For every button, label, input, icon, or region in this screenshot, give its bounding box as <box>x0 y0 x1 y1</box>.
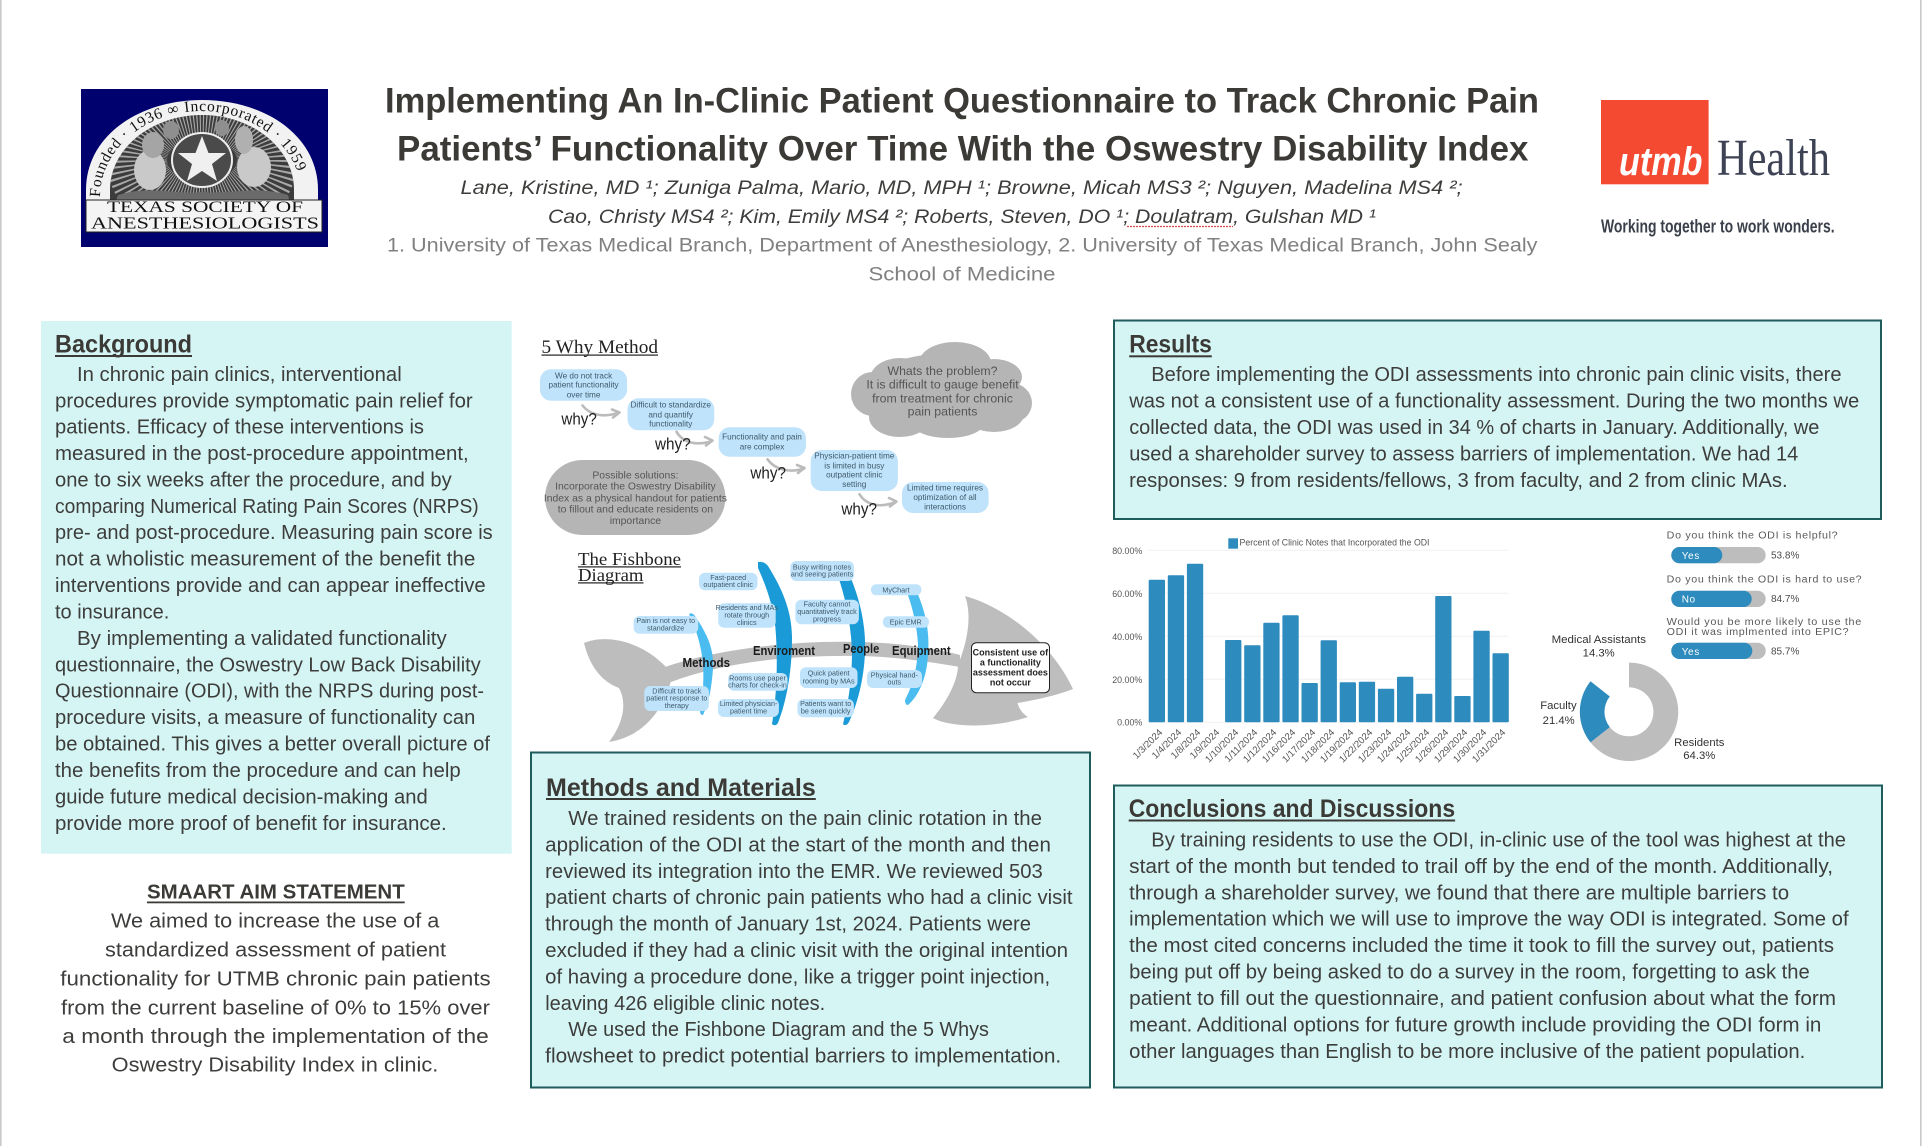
problem box: not occur <box>990 678 1031 688</box>
cause: pain not easy <box>634 616 698 634</box>
cause: residents rotate: rotate through <box>724 611 769 620</box>
text block: results body: collected data, the ODI was used in 34 % of charts in January. Additionally, we <box>1129 417 1819 439</box>
x axis labels: 1/16/2024 <box>1260 727 1299 765</box>
authors: Cao, Christy MS4 ²; Kim, Emily MS4 ²; Roberts, Steven, DO ¹; Doulatram, Gulshan MD ¹ <box>548 206 1377 228</box>
pill: possible solutions: Possible solutions: <box>592 470 678 481</box>
text block: methods body: excluded if they had a clinic visit with the original intention <box>545 940 1068 962</box>
step 3 <box>719 427 806 457</box>
question 3: 85.7% <box>1771 646 1799 657</box>
logo: UTMB Health: Working together to work wonders. <box>1601 216 1835 236</box>
step 1 <box>540 369 627 401</box>
affiliations <box>387 236 1538 286</box>
text block: conclusions body: meant. Additional options for future growth include providing the ODI form in <box>1129 1014 1821 1036</box>
question 1: 53.8% <box>1771 550 1799 562</box>
logo: UTMB Health <box>1601 100 1835 236</box>
text block: aim statement: from the current baseline of 0% to 15% over <box>61 997 490 1019</box>
text block: background body <box>55 364 493 835</box>
cause: difficult to track: Difficult to track <box>652 686 702 695</box>
cause: residents rotate: Residents and MAs <box>716 603 778 612</box>
pill: possible solutions <box>544 460 727 535</box>
step 3: Functionality and pain <box>722 433 802 442</box>
x axis labels: 1/3/2024 <box>1131 727 1166 762</box>
problem box: Consistent use of <box>973 647 1049 657</box>
text block: background body: By implementing a validated functionality <box>77 628 447 650</box>
pill: possible solutions: to fillout and educate residents on <box>558 505 713 516</box>
x axis labels: 1/22/2024 <box>1337 727 1376 765</box>
donut labels: Residents <box>1674 737 1725 749</box>
text block: methods body <box>545 808 1073 1068</box>
text block: results body: Before implementing the ODI assessments into chronic pain clinic visits, there <box>1151 364 1842 386</box>
cause: quick rooming: Quick patient <box>808 669 850 678</box>
text block: background body: patients. Efficacy of these interventions is <box>55 417 424 439</box>
text block: conclusions body: other languages than English to be more inclusive of the patient population. <box>1129 1041 1805 1063</box>
text block: background body: pre- and post-procedure. Measuring pain score is <box>55 522 493 544</box>
cause: physical handouts <box>867 670 922 688</box>
cause: Epic EMR: Epic EMR <box>890 618 922 626</box>
text block: background body: In chronic pain clinics, interventional <box>77 364 402 386</box>
cause: physical handouts: outs <box>888 678 901 687</box>
text block: results body: responses: 9 from residents/fellows, 3 from faculty, and 2 from clinic MAs. <box>1129 470 1788 492</box>
donut labels: Medical Assistants <box>1552 634 1646 646</box>
heading: background: Background <box>55 330 192 358</box>
x axis labels: 1/4/2024 <box>1150 727 1185 762</box>
text block: background body: provide more proof of benefit for insurance. <box>55 813 447 835</box>
x axis labels: 1/10/2024 <box>1203 727 1242 765</box>
title <box>385 82 1539 168</box>
cause: faculty cannot track: progress <box>813 614 841 623</box>
x axis labels: 1/17/2024 <box>1280 727 1319 765</box>
cause: busy writing notes: and seeing patients <box>791 570 854 579</box>
category labels: Enviroment <box>753 644 816 658</box>
cloud: what's the problem: It is difficult to gauge benefit <box>866 378 1019 392</box>
text block: aim statement: functionality for UTMB chronic pain patients <box>60 968 491 990</box>
donut chart: respondents <box>1540 634 1725 762</box>
question 1: Yes <box>1682 551 1700 562</box>
authors: Lane, Kristine, MD ¹; Zuniga Palma, Mario, MD, MPH ¹; Browne, Micah MS3 ²; Nguyen, Madelina MS4 ²; <box>460 177 1462 199</box>
authors <box>460 177 1462 228</box>
cause: faculty cannot track: Faculty cannot <box>804 600 850 609</box>
donut labels: 21.4% <box>1543 715 1575 727</box>
question 3: Would you be more likely to use the <box>1667 617 1862 628</box>
cause: paper charts <box>728 673 788 691</box>
donut labels: 64.3% <box>1683 750 1715 762</box>
x axis labels: 1/25/2024 <box>1394 727 1433 765</box>
cause: pain not easy: Pain is not easy to <box>636 616 695 625</box>
panel: methods and materials <box>531 752 1090 1088</box>
step 4 <box>811 450 898 491</box>
text block: conclusions body: patient to fill out the questionnaire, and patient confusion about what the form <box>1129 988 1836 1010</box>
heading: 5 why method: 5 Why Method <box>542 337 659 358</box>
text block: conclusions body <box>1129 829 1849 1063</box>
panel: 5 why method <box>540 337 1032 535</box>
step 2: functionality <box>649 420 693 429</box>
category labels: Methods <box>682 656 730 670</box>
title: Implementing An In-Clinic Patient Questionnaire to Track Chronic Pain <box>385 82 1539 120</box>
logo: UTMB Health: Health <box>1717 130 1830 187</box>
cause: residents rotate: clinics <box>737 618 757 627</box>
step 5: interactions <box>924 502 966 511</box>
category labels: People <box>843 642 879 656</box>
cause: quick rooming: rooming by MAs <box>803 676 855 685</box>
category labels <box>682 642 951 670</box>
y axis labels: 80.00% <box>1112 546 1142 556</box>
arrows: why connectors <box>582 406 896 506</box>
donut labels: Faculty <box>1540 700 1577 712</box>
x axis labels: 1/24/2024 <box>1375 727 1414 765</box>
cause: fast-paced clinic: outpatient clinic <box>703 580 753 589</box>
cause: physical handouts: Physical hand- <box>871 670 918 679</box>
step 1: patient functionality <box>549 381 620 390</box>
question 2: Do you think the ODI is hard to use? <box>1667 575 1862 586</box>
text block: background body: procedures provide symptomatic pain relief for <box>55 390 473 412</box>
panel: background <box>41 321 512 854</box>
step 5: Limited time requires <box>907 484 983 493</box>
cause: difficult to track: therapy <box>665 701 689 710</box>
text block: background body: one to six weeks after the procedure, and by <box>55 469 452 491</box>
heading: methods and materials: Methods and Materials <box>546 774 816 802</box>
step 1: over time <box>567 390 601 399</box>
cause: MyChart <box>871 584 921 595</box>
cause: Epic EMR <box>883 616 929 628</box>
bars <box>1149 564 1509 722</box>
y axis labels: 0.00% <box>1117 718 1142 728</box>
cloud: what's the problem <box>851 342 1032 438</box>
question 2 <box>1667 575 1862 607</box>
text block: background body: questionnaire, the Oswestry Low Back Disability <box>55 654 481 676</box>
cause: fast-paced clinic <box>699 573 758 590</box>
text block: conclusions body: implementation which we will use to improve the way ODI is integrated. Some of <box>1129 908 1849 930</box>
text block: conclusions body: through a shareholder survey, we found that there are multiple barriers to <box>1129 882 1789 904</box>
problem box: assessment does <box>973 668 1048 678</box>
cause: fast-paced clinic: Fast-paced <box>710 573 746 582</box>
y axis labels: 60.00% <box>1112 589 1142 599</box>
panel: fishbone diagram <box>578 549 1073 742</box>
text block: results body: was not a consistent use of a functionality assessment. During the two months we <box>1128 391 1859 413</box>
cause: quick rooming <box>800 667 858 688</box>
text block: aim statement: We aimed to increase the use of a <box>111 910 440 932</box>
pill: possible solutions: importance <box>610 516 661 527</box>
text block: conclusions body: the most cited concerns included the time it took to fill the survey out, patients <box>1129 935 1834 957</box>
text block: aim statement: a month through the implementation of the <box>62 1026 489 1048</box>
text block: background body: be obtained. This gives a better overall picture of <box>55 734 490 756</box>
x axis labels: 1/26/2024 <box>1413 727 1452 765</box>
cause: faculty cannot track <box>795 600 859 624</box>
text block: methods body: leaving 426 eligible clinic notes. <box>545 993 825 1015</box>
x axis labels: 1/11/2024 <box>1223 727 1261 765</box>
bones <box>689 562 928 725</box>
cloud: what's the problem: pain patients <box>908 405 977 419</box>
cause: difficult to track <box>644 686 709 711</box>
question 2: 84.7% <box>1771 594 1799 605</box>
cause: faculty cannot track: quantitatively track <box>797 607 857 616</box>
text block: aim statement <box>60 910 491 1077</box>
x axis labels: 1/23/2024 <box>1356 727 1395 765</box>
why labels: why? <box>841 499 877 518</box>
affiliations: School of Medicine <box>868 264 1056 286</box>
y axis labels: 20.00% <box>1112 675 1142 685</box>
text block: background body: the benefits from the procedure and can help <box>55 760 461 782</box>
residents segment <box>1590 663 1678 761</box>
step 4: is limited in busy <box>824 461 885 470</box>
cause: residents rotate <box>716 603 778 628</box>
why labels: why? <box>561 410 597 429</box>
heading: conclusions and discussions: Conclusions and Discussions <box>1129 795 1455 823</box>
question 1 <box>1667 531 1838 563</box>
text block: background body: Questionnaire (ODI), with the NRPS during post- <box>55 681 484 703</box>
logo: Texas Society of Anesthesiologists: Founded · 1936 ∞ Incorporated · 1959 <box>90 102 306 197</box>
step 4: Physician-patient time <box>814 452 895 461</box>
text block: methods body: flowsheet to predict potential barriers to implementation. <box>545 1046 1061 1068</box>
step 2: Difficult to standardize <box>630 401 711 410</box>
text block: methods body: application of the ODI at the start of the month and then <box>545 834 1051 856</box>
problem box: a functionality <box>980 658 1041 668</box>
why labels: why? <box>750 463 786 482</box>
logo: Texas Society of Anesthesiologists: ANESTHESIOLOGISTS <box>91 214 319 232</box>
text block: methods body: patient charts of chronic pain patients who had a clinic visit <box>545 887 1073 909</box>
survey bars <box>1667 531 1862 659</box>
logo: UTMB Health: utmb <box>1619 140 1702 184</box>
logo: Texas Society of Anesthesiologists <box>81 89 328 247</box>
text block: background body: comparing Numerical Rating Pain Scores (NRPS) <box>55 496 479 518</box>
cause: paper charts: charts for check-in <box>728 681 787 690</box>
x axis labels: 1/8/2024 <box>1169 727 1204 762</box>
cause: patients want speed: be seen quickly <box>801 706 851 715</box>
problem box <box>972 643 1050 693</box>
text block: background body: measured in the post-procedure appointment, <box>55 443 469 465</box>
cause: patients want speed <box>798 699 854 717</box>
question 3: ODI it was implmented into EPIC? <box>1667 627 1849 638</box>
text block: methods body: We used the Fishbone Diagram and the 5 Whys <box>568 1019 989 1041</box>
x axis labels: 1/12/2024 <box>1241 727 1280 765</box>
donut labels: 14.3% <box>1583 647 1615 659</box>
text block: aim statement: standardized assessment of patient <box>105 940 446 962</box>
panel: conclusions and discussions <box>1114 786 1882 1088</box>
heading: fishbone diagram: Diagram <box>578 565 644 585</box>
heading: fishbone diagram: The Fishbone <box>578 549 681 569</box>
step 5 <box>902 482 989 513</box>
heading: SMAART aim statement: SMAART AIM STATEMENT <box>147 880 405 904</box>
cause: busy writing notes: Busy writing notes <box>793 562 852 571</box>
x axis labels: 1/29/2024 <box>1432 727 1471 765</box>
step 4: setting <box>842 480 867 489</box>
step 3: are complex <box>740 443 784 452</box>
text block: aim statement: Oswestry Disability Index in clinic. <box>112 1055 438 1077</box>
text block: conclusions body: By training residents to use the ODI, in-clinic use of the tool was highest at the <box>1151 829 1846 851</box>
question 3: Yes <box>1682 647 1700 658</box>
step 2 <box>628 398 714 430</box>
cause: pain not easy: standardize <box>647 624 684 632</box>
cause: MyChart: MyChart <box>882 586 910 594</box>
donut labels <box>1540 634 1725 762</box>
cause: difficult to track: patient response to <box>646 694 707 703</box>
cloud: what's the problem: from treatment for chronic <box>872 391 1013 405</box>
text block: methods body: We trained residents on the pain clinic rotation in the <box>568 808 1042 830</box>
title: Patients’ Functionality Over Time With the Oswestry Disability Index <box>397 130 1529 168</box>
affiliations: 1. University of Texas Medical Branch, Department of Anesthesiology, 2. University of Texas Medical Branch, John Sealy <box>387 236 1538 256</box>
cause: limited time <box>718 699 779 717</box>
text block: methods body: through the month of January 1st, 2024. Patients were <box>545 914 1031 936</box>
heading: results: Results <box>1129 330 1212 358</box>
question 2: No <box>1682 594 1696 606</box>
step 2: and quantify <box>648 410 694 419</box>
cause: limited time: Limited physician- <box>720 699 778 708</box>
faculty segment <box>1580 681 1610 742</box>
panel: results <box>1114 320 1881 519</box>
x axis labels: 1/19/2024 <box>1318 727 1357 765</box>
cloud: what's the problem: Whats the problem? <box>887 364 998 378</box>
question 3 <box>1667 617 1862 659</box>
x axis labels: 1/30/2024 <box>1451 727 1490 765</box>
text block: background body: interventions provide and can appear ineffective <box>55 575 486 597</box>
text block: methods body: reviewed its integration into the EMR. We reviewed 503 <box>545 861 1043 883</box>
why labels <box>561 410 877 518</box>
panel: SMAART aim statement <box>60 880 491 1077</box>
x axis labels: 1/31/2024 <box>1470 727 1509 765</box>
cause: patients want speed: Patients want to <box>800 699 851 708</box>
text block: results body: used a shareholder survey to assess barriers of implementation. We had 14 <box>1129 443 1798 465</box>
bar chart: percent of clinic notes <box>1112 538 1509 765</box>
text block: results body <box>1128 364 1859 492</box>
step 1: We do not track <box>555 371 613 380</box>
y axis labels <box>1112 546 1142 728</box>
step 4: outpatient clinic <box>826 471 883 480</box>
text block: background body: not a wholistic measurement of the benefit the <box>55 548 475 570</box>
text block: background body: guide future medical decision-making and <box>55 786 428 808</box>
fish body <box>584 596 1073 742</box>
text block: background body: to insurance. <box>55 602 169 624</box>
text block: conclusions body: start of the month but tended to trail off by the end of the month. Additionally, <box>1129 856 1833 878</box>
category labels: Equipment <box>892 644 951 658</box>
pill: possible solutions: Incorporate the Oswestry Disability <box>555 482 716 493</box>
question 1: Do you think the ODI is helpful? <box>1667 531 1838 542</box>
x axis labels: 1/18/2024 <box>1299 727 1338 765</box>
cause: busy writing notes <box>790 561 854 581</box>
text block: methods body: of having a procedure done, like a trigger point injection, <box>545 966 1050 988</box>
pill: possible solutions: Index as a physical handout for patients <box>544 493 727 504</box>
text block: background body: procedure visits, a measure of functionality can <box>55 707 475 729</box>
chart legend: Percent of Clinic Notes that Incorporated the ODI <box>1240 538 1430 549</box>
step 5: optimization of all <box>913 493 977 502</box>
cause: paper charts: Rooms use paper <box>729 673 786 682</box>
x axis labels <box>1131 727 1509 765</box>
cause: limited time: patient time <box>730 706 767 715</box>
logo: Texas Society of Anesthesiologists: TEXAS SOCIETY OF <box>107 199 303 216</box>
why labels: why? <box>654 435 691 454</box>
y axis labels: 40.00% <box>1112 632 1142 642</box>
heading: fishbone diagram <box>578 549 681 585</box>
x axis labels: 1/9/2024 <box>1188 727 1223 762</box>
text block: conclusions body: being put off by being asked to do a survey in the room, forgetting to ask the <box>1129 961 1810 983</box>
